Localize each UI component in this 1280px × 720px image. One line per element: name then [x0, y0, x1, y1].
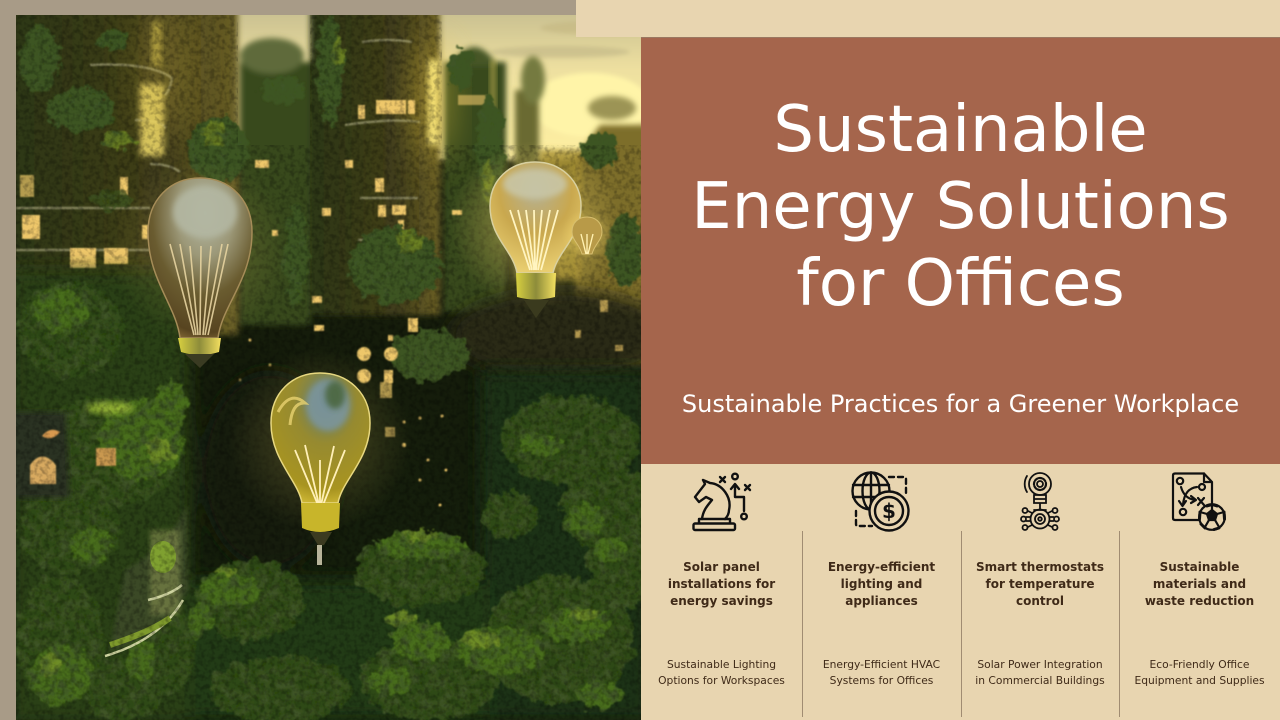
sunset sky	[225, 10, 660, 160]
column 4 heading: Sustainable	[1160, 560, 1239, 574]
buildings	[10, 10, 650, 365]
column 2: efficient lighting	[823, 471, 940, 687]
broad soft canopy tones	[10, 270, 650, 720]
column 3: smart thermostats	[975, 472, 1105, 687]
column 1 note: Sustainable Lighting	[667, 658, 776, 671]
title: for Offices	[796, 247, 1125, 321]
icon: playbook page and ball	[1172, 472, 1226, 531]
backdrop block: taupe L-shaped frame	[0, 0, 576, 720]
subtitle: Sustainable Practices for a Greener Workplace	[682, 390, 1239, 418]
curved green tower with balconies	[105, 505, 188, 656]
bulb: right	[450, 140, 620, 318]
lit terrace windows	[312, 296, 448, 506]
column 3 heading	[976, 560, 1104, 608]
icon: chess knight strategy	[692, 472, 752, 532]
column 3 note: Solar Power Integration	[977, 658, 1103, 671]
fine leaf texture overlay	[16, 15, 641, 720]
column 4 heading: waste reduction	[1145, 594, 1254, 608]
icon: globe and dollar coin	[851, 471, 910, 532]
lit windows	[20, 95, 623, 382]
column 1 heading	[668, 560, 776, 608]
sunlit glass and glow streaks	[139, 0, 496, 160]
column 3 note: in Commercial Buildings	[975, 674, 1105, 687]
column 2 heading: appliances	[845, 594, 918, 608]
upper foliage on towers	[20, 15, 643, 381]
column 3 heading: control	[1016, 594, 1064, 608]
hero photo: glowing light bulbs in a green forest city	[16, 15, 641, 720]
title panel	[641, 37, 1280, 464]
title	[691, 93, 1230, 321]
column 4: sustainable materials	[1134, 472, 1265, 687]
column 4 heading: materials and	[1153, 577, 1246, 591]
title: Energy Solutions	[691, 170, 1230, 244]
title: Sustainable	[773, 93, 1148, 167]
column 3 heading: Smart thermostats	[976, 560, 1104, 574]
icon: smart bulb and circuit	[1020, 472, 1060, 531]
column 2 heading: Energy-efficient	[828, 560, 935, 574]
column 4 heading	[1145, 560, 1254, 608]
column 2 note: Energy-Efficient HVAC	[823, 658, 940, 671]
column 1 heading: energy savings	[670, 594, 773, 608]
column 1 note	[658, 658, 785, 687]
column 4 note	[1134, 658, 1265, 687]
column 1 heading: Solar panel	[683, 560, 760, 574]
column 2 note	[823, 658, 940, 687]
shaded mid-storey on the right	[450, 290, 670, 380]
icon: globe and dollar coin: $	[882, 499, 896, 523]
moss ledge highlight	[86, 402, 134, 414]
top beige band	[576, 0, 1280, 37]
column 1 note: Options for Workspaces	[658, 674, 785, 687]
column 4 note: Eco-Friendly Office	[1150, 658, 1249, 671]
bulb: left	[110, 160, 290, 368]
column 3 note	[975, 658, 1105, 687]
lower foliage canopy	[16, 282, 660, 720]
column 2 heading: lighting and	[841, 577, 922, 591]
column 3 heading: for temperature	[985, 577, 1095, 591]
bulb: centre	[228, 348, 412, 565]
column 1: solar panels	[658, 472, 785, 687]
column 2 heading	[828, 560, 935, 608]
dark forest base	[16, 15, 641, 720]
building floor bands	[16, 40, 420, 250]
column 1 heading: installations for	[668, 577, 775, 591]
column 2 note: Systems for Offices	[830, 674, 933, 687]
lower panel: four solution columns	[641, 464, 1280, 720]
column 4 note: Equipment and Supplies	[1134, 674, 1265, 687]
dark building nook with arched windows	[10, 412, 116, 498]
